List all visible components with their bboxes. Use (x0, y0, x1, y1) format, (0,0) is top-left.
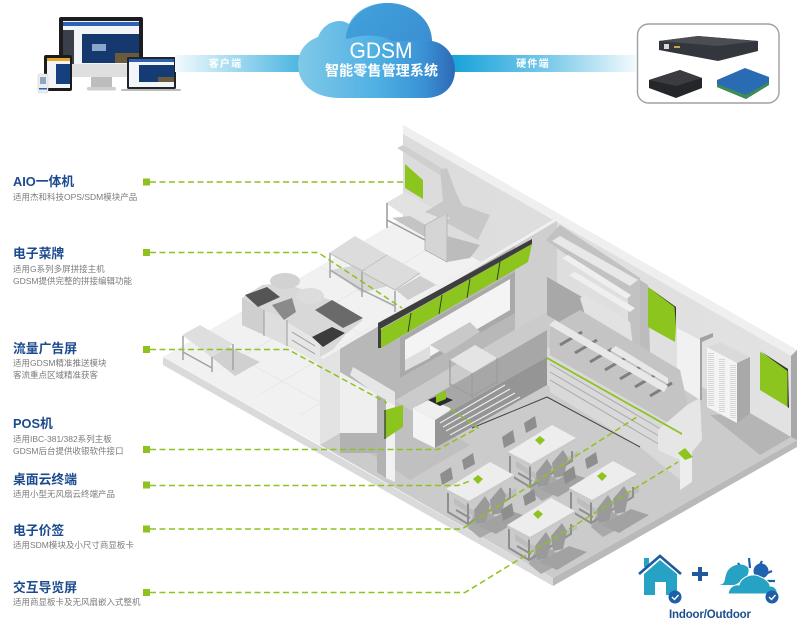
callout: electronic price tag (13, 417, 637, 550)
heading: traffic ad screen: 流量广告屏 (13, 341, 77, 356)
icon: back wall ad screen two (760, 351, 789, 408)
connector: traffic ad screen (143, 346, 387, 403)
indoor and outdoor badge (639, 556, 778, 621)
callout: traffic ad screen (13, 341, 387, 403)
digital menu board (378, 239, 532, 348)
description: POS: 适用IBC-381/382系列主板 (13, 434, 112, 444)
label: client: 客户端 (209, 57, 242, 70)
callout: desktop cloud terminal (13, 472, 470, 499)
heading: POS: POS机 (13, 416, 53, 431)
icon: tablet (44, 55, 72, 91)
table: right (563, 452, 649, 537)
panel: hardware devices (638, 24, 779, 103)
label: hardware: 硬件端 (516, 57, 550, 70)
back wall (403, 125, 797, 455)
icon: AIO screen (405, 164, 423, 199)
icon: plus (692, 567, 708, 581)
description: digital menu: GDSM提供完整的拼接编辑功能 (13, 276, 133, 286)
table: rear (502, 416, 588, 501)
connector: electronic price tag (143, 417, 637, 532)
kitchen work tables (329, 236, 436, 312)
description: electronic price tag: 适用SDM模块及小尺寸商显板卡 (13, 540, 134, 550)
icon: phone (38, 74, 48, 93)
service counter (413, 310, 702, 480)
serving window (400, 272, 515, 378)
description: traffic ad screen: 适用GDSM精准推送模块 (13, 358, 107, 368)
connector: desktop cloud terminal (143, 481, 470, 488)
connector: digital menu (143, 249, 402, 308)
back wall shelving (546, 225, 655, 364)
description: AIO: 适用杰和科技OPS/SDM模块产品 (13, 192, 137, 202)
dining tables with cloud terminals (440, 416, 649, 574)
callout: digital menu (13, 246, 402, 308)
heading: digital menu: 电子菜牌 (13, 246, 64, 261)
icon: table tag rear (535, 436, 545, 445)
callout: interactive guide screen (13, 462, 678, 607)
connector: AIO (143, 178, 403, 186)
connector band: client (175, 55, 305, 72)
connector band: hardware (450, 55, 636, 72)
icon: sun and clouds (719, 558, 778, 604)
kitchen prep shelves (386, 145, 490, 262)
cloud: GDSM system (298, 3, 455, 98)
heading: interactive guide screen: 交互导览屏 (13, 580, 77, 595)
table: front (501, 489, 587, 574)
table: left (440, 453, 526, 538)
description: interactive guide screen: 适用商显板卡及无风扇嵌入式整机 (13, 597, 141, 607)
callout: AIO (13, 174, 403, 202)
kitchen side table (182, 325, 260, 376)
icon: table tag front (533, 510, 543, 519)
description: digital menu: 适用G系列多屏拼接主机 (13, 264, 105, 274)
icon: desktop monitor (59, 17, 143, 90)
description: traffic ad screen: 客流重点区域精准获客 (13, 370, 99, 380)
kitchen pillar (350, 367, 395, 482)
kitchen stoves (242, 273, 363, 365)
heading: desktop cloud terminal: 桌面云终端 (13, 472, 77, 487)
title: GDSM: GDSM (350, 38, 412, 63)
callout: POS (13, 407, 478, 456)
icon: table tag left (473, 475, 483, 484)
connector: POS (143, 407, 478, 453)
subtitle: system name: 智能零售管理系统 (325, 62, 438, 78)
icon: POS terminal (428, 390, 453, 406)
header: client devices (38, 17, 181, 93)
partition wall (320, 217, 560, 453)
icon: table tag right (597, 472, 607, 481)
heading: electronic price tag: 电子价签 (13, 523, 64, 538)
heading: AIO: AIO一体机 (13, 174, 74, 189)
label: Indoor/Outdoor: Indoor/Outdoor (669, 609, 752, 621)
icon: interactive kiosk (678, 448, 693, 490)
floor slab (163, 218, 797, 586)
icon: rack host (659, 36, 758, 61)
icon: mini box terminal (649, 70, 702, 98)
refrigerator cabinet (677, 328, 750, 423)
icon: back wall ad screen one (648, 287, 676, 342)
icon: traffic ad screen (385, 405, 403, 439)
connector: interactive guide screen (143, 462, 678, 596)
description: POS: GDSM后台提供收银软件接口 (13, 446, 124, 456)
description: desktop cloud terminal: 适用小型无风扇云终端产品 (13, 489, 115, 499)
icon: laptop (121, 57, 181, 91)
icon: blue module (717, 68, 769, 99)
icon: house (639, 556, 682, 604)
isometric restaurant scene (163, 125, 797, 586)
